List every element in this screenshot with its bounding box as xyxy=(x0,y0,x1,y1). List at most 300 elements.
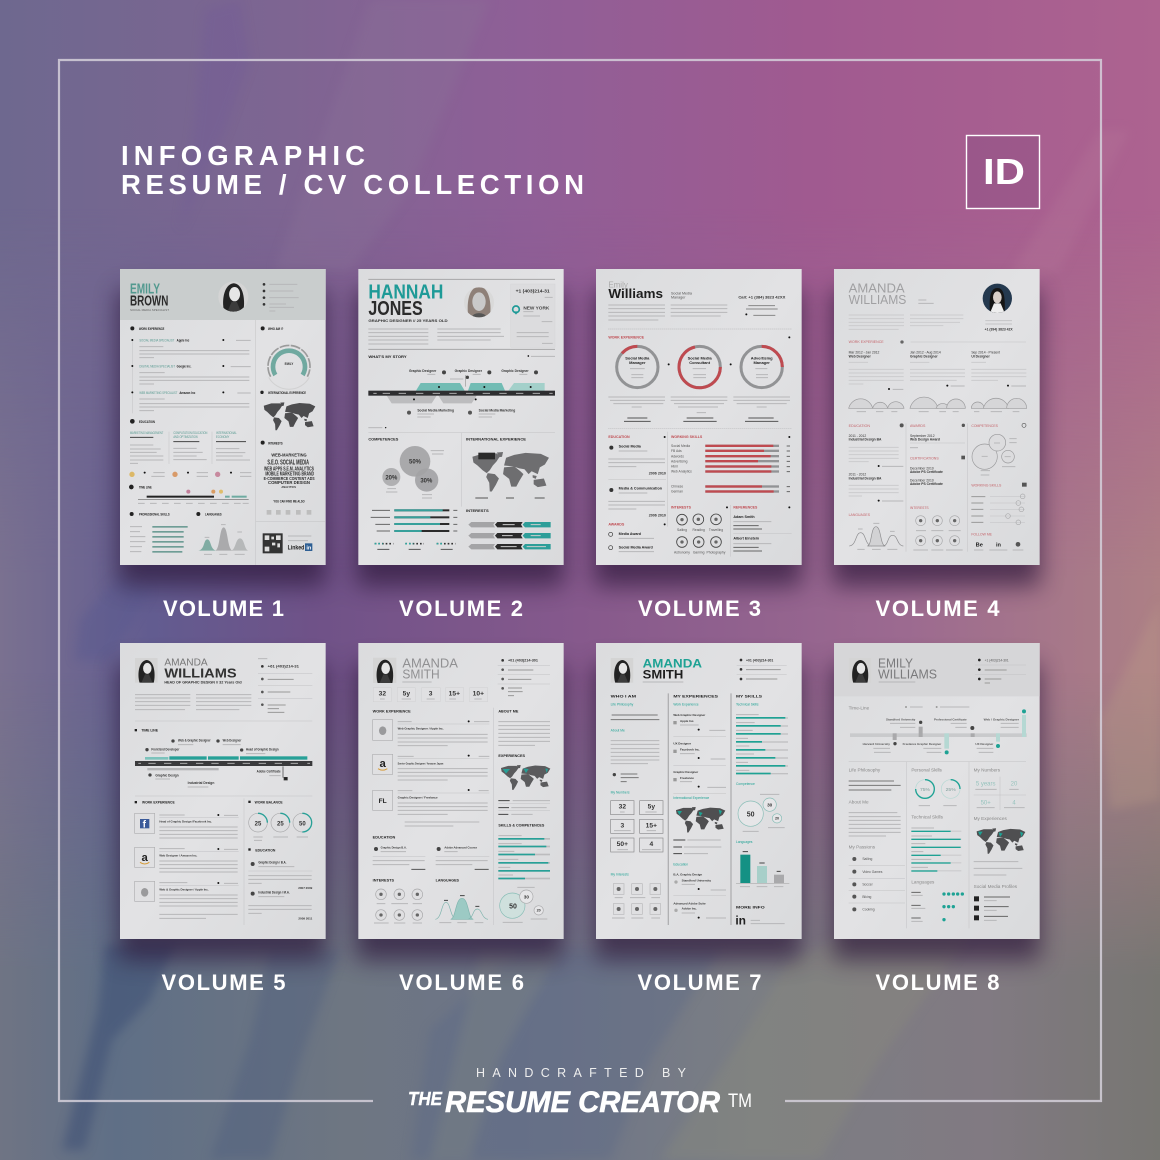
name xyxy=(849,280,906,307)
my numbers: 5 years xyxy=(976,782,995,788)
who I am column: 50+ xyxy=(617,841,628,848)
work balance rings: WORK BALANCE xyxy=(255,800,283,804)
my experiences column: MY EXPERIENCES xyxy=(673,693,718,698)
education: Industrial Design / M.A. xyxy=(258,891,290,895)
what's my story timeline: Graphic Designer xyxy=(455,369,483,373)
what's my story timeline xyxy=(368,355,555,428)
technical skills bars: Technical Skills xyxy=(911,815,944,820)
resume: Amanda Smith, volume 6 xyxy=(358,643,564,939)
life philosophy: About Me xyxy=(849,799,869,804)
time-line: Web / Graphic Designer xyxy=(984,717,1020,721)
who am I gauge: EMILY xyxy=(285,362,294,366)
my numbers: 4 xyxy=(1012,800,1016,806)
education: 2009 2011 xyxy=(298,916,313,920)
who I am column: 4 xyxy=(649,841,653,848)
languages area chart xyxy=(849,513,903,549)
international experience map xyxy=(466,437,549,498)
follow me xyxy=(971,532,1023,550)
my experiences column: Apple Inc. xyxy=(680,719,694,723)
volume labels: VOLUME 2 xyxy=(399,596,523,621)
work experience: Mar 2012 - Jan 2012 xyxy=(849,351,880,355)
education: 2011 - 2012 xyxy=(849,434,866,438)
name xyxy=(402,655,458,682)
who I am column: 32 xyxy=(619,804,626,811)
who I am column: 15+ xyxy=(646,822,657,829)
my numbers: My Numbers xyxy=(974,768,1001,773)
contact list xyxy=(498,659,550,696)
interests word cloud: WEB-MARKETING xyxy=(271,453,307,458)
my experiences column: Web Graphic Designer xyxy=(673,713,706,717)
work balance rings xyxy=(248,800,312,840)
row two, right pair of resumes xyxy=(596,643,1040,939)
education: AWARDS xyxy=(608,523,625,527)
resume: Emily Brown, volume 1 xyxy=(120,269,326,565)
skills and competences bars xyxy=(498,823,550,879)
footer credit: HANDCRAFTED BY xyxy=(476,1066,687,1080)
competence bubbles: 20 xyxy=(537,909,541,913)
my passions xyxy=(849,845,905,912)
name: HANNAH xyxy=(368,280,443,303)
my passions: Biking xyxy=(862,895,872,899)
QR code and LinkedIn xyxy=(263,533,312,553)
awards and certifications: AWARDS xyxy=(910,424,926,428)
competences bubble chart: 50% xyxy=(409,460,422,466)
languages area chart: LANGUAGES xyxy=(205,512,222,517)
my skills column: Competence xyxy=(736,782,755,786)
my passions: My Passions xyxy=(849,845,876,850)
references: REFERENCES xyxy=(733,506,758,510)
time line: Web Designer xyxy=(223,739,242,743)
about me: ABOUT ME xyxy=(498,709,519,713)
languages area chart xyxy=(435,878,488,923)
my experiences column: Work Experience xyxy=(673,703,699,707)
who I am column: 5y xyxy=(648,804,655,811)
portrait xyxy=(464,287,494,317)
name: JONES xyxy=(368,298,423,320)
education: Media Award xyxy=(619,532,641,536)
stat boxes: 15+ xyxy=(449,691,460,698)
work experience rings: Manager xyxy=(629,360,646,365)
professional skills bars: PROFESSIONAL SKILLS xyxy=(139,512,170,517)
my numbers xyxy=(974,768,1026,810)
work experience: a xyxy=(142,852,149,864)
references: Adam Smith xyxy=(733,515,755,519)
work experience rings: Manager xyxy=(753,360,770,365)
interests icons: INTERESTS xyxy=(373,878,395,882)
education: EDUCATION xyxy=(255,848,276,852)
name: EMILY xyxy=(130,281,160,297)
footer credit: TM xyxy=(728,1091,752,1112)
contact list: +01 (403)214-301 xyxy=(746,659,773,663)
follow me: FOLLOW ME xyxy=(971,532,993,536)
work experience: UI Designer xyxy=(971,354,991,358)
work experience: WORK EXPERIENCE xyxy=(373,709,411,713)
name: EMILY xyxy=(878,656,914,670)
education: 2006 2010 xyxy=(649,471,666,475)
who I am column: WHO I AM xyxy=(611,693,637,698)
name: AMANDA xyxy=(643,656,702,670)
working skills bars: German xyxy=(671,490,683,494)
name: GRAPHIC DESIGNER // 25 YEARS OLD xyxy=(368,318,448,323)
work experience rings: Consultant xyxy=(689,360,711,365)
my skills column xyxy=(735,693,789,928)
education: ECONOMY xyxy=(216,435,230,439)
name: SOCIAL MEDIA SPECIALIST xyxy=(130,308,169,312)
contact list xyxy=(263,283,299,311)
my skills column: MY SKILLS xyxy=(736,693,762,698)
my passions: Cooking xyxy=(862,908,875,912)
references xyxy=(733,506,792,551)
volume labels: VOLUME 6 xyxy=(399,970,524,995)
QR code and LinkedIn: Linked xyxy=(288,545,305,551)
my experiences column: Facebook Inc. xyxy=(680,747,700,751)
professional skills bars xyxy=(130,512,188,553)
interests word cloud: S.E.O. SOCIAL MEDIA xyxy=(267,457,309,466)
my experiences column: UX Designer xyxy=(673,742,692,746)
education: EDUCATION xyxy=(608,435,630,439)
what's my story timeline: Social Media Marketing xyxy=(479,408,515,412)
time line: Graphic Design xyxy=(155,773,179,777)
my experiences map: My Experiences xyxy=(974,816,1007,821)
work experience rings: Advertising xyxy=(751,356,773,361)
time-line: Standford University xyxy=(886,717,916,721)
work experience: Apple Inc xyxy=(177,339,189,343)
work experience xyxy=(849,340,1027,412)
work balance rings: 50 xyxy=(299,821,306,827)
interests chips: INTERESTS xyxy=(466,509,489,513)
name: Emily xyxy=(608,280,628,289)
you can find me xyxy=(267,499,311,515)
education: Graphic Design / B.A. xyxy=(258,861,286,865)
work experience: Sep 2014 - Present xyxy=(971,351,1000,355)
name xyxy=(368,280,448,323)
work experience rings xyxy=(608,336,790,421)
who I am column: 3 xyxy=(620,822,624,829)
my experiences column: B.A, Graphic Design xyxy=(673,873,702,877)
time line xyxy=(129,485,249,503)
contact list xyxy=(975,659,1026,683)
what's my story timeline: WHAT'S MY STORY xyxy=(368,355,407,359)
competences bubble chart xyxy=(368,433,555,507)
footer credit xyxy=(408,1066,752,1119)
who I am column: My Interests xyxy=(611,873,629,877)
work experience xyxy=(130,326,251,413)
work experience rings: WORK EXPERIENCE xyxy=(608,336,645,340)
stat boxes: 10+ xyxy=(473,691,484,698)
education: Industrial Design BA xyxy=(849,476,882,480)
volume labels: VOLUME 7 xyxy=(638,970,762,995)
my numbers: 50+ xyxy=(981,800,991,806)
work experience: Graphic Designer xyxy=(910,354,938,358)
working skills sliders: WORKING SKILLS xyxy=(971,483,1002,487)
time line: Web & Graphic Designer xyxy=(178,739,211,743)
name: BROWN xyxy=(130,294,168,310)
my skills column: Languages xyxy=(736,840,753,844)
about me xyxy=(498,709,550,745)
interests word cloud: MOBILE MARKETING BRAND xyxy=(265,472,314,478)
awards and certifications: September 2012 xyxy=(910,434,935,438)
stat boxes: 5y xyxy=(403,691,410,698)
name xyxy=(164,658,242,685)
resume: Amanda Williams, volume 4: +1 (394) 3823 42X xyxy=(985,327,1013,331)
resume: Amanda Smith, volume 7 xyxy=(596,643,802,939)
time line: Head of Graphic Design xyxy=(246,748,279,752)
awards and certifications: December 2010 xyxy=(910,478,934,482)
competences bubbles xyxy=(906,423,1026,552)
who I am column: My Numbers xyxy=(611,790,630,794)
name: HEAD OF GRAPHIC DESIGN // 32 Years Old xyxy=(164,681,242,685)
stat boxes xyxy=(373,688,488,702)
my experiences column: International Experience xyxy=(673,796,709,800)
skill bars xyxy=(371,509,457,549)
contact list: +61 (403)214-31 xyxy=(268,665,299,669)
what's my story timeline: Graphic Designer xyxy=(409,369,437,373)
interests icons xyxy=(671,506,728,554)
education: EDUCATION xyxy=(849,424,870,428)
my experiences column xyxy=(673,693,726,919)
work experience: Web Graphic Designer / Apple Inc. xyxy=(398,727,444,731)
work experience: a xyxy=(380,758,387,770)
education: COMPUTATION EDUCATION xyxy=(173,431,208,435)
education xyxy=(608,435,666,552)
work experience: Amazon Inc xyxy=(179,391,195,395)
work experience xyxy=(373,709,489,826)
my passions: Sailing xyxy=(862,857,872,861)
working skills bars xyxy=(671,435,790,494)
follow me: in xyxy=(996,543,1002,549)
education: Social Media Award xyxy=(619,545,653,549)
interests word cloud: COMPUTER DESIGN xyxy=(268,480,311,485)
logo badge: ID: ID xyxy=(983,151,1025,192)
interests icons: Gaming xyxy=(693,550,705,554)
my experiences column: Freelance xyxy=(680,776,694,780)
references: Albert Einstein xyxy=(733,537,759,541)
interests icons xyxy=(373,878,423,923)
volume labels: VOLUME 4 xyxy=(876,596,1000,621)
who I am column xyxy=(611,693,663,918)
contact box: NEW YORK xyxy=(523,305,550,311)
name: WILLIAMS xyxy=(164,667,237,681)
volume labels: VOLUME 3 xyxy=(638,596,761,621)
name: AMANDA xyxy=(849,280,905,295)
working skills bars: Advertising xyxy=(671,459,688,463)
personal skills rings: 25% xyxy=(946,787,956,793)
competence bubbles: 30 xyxy=(524,895,529,900)
competence bubbles xyxy=(500,887,547,922)
education xyxy=(849,423,904,502)
skills and competences bars: SKILLS & COMPETENCES xyxy=(498,823,545,827)
education: INTERNATIONAL xyxy=(216,431,237,435)
social media profiles: Social Media Profiles xyxy=(974,884,1018,889)
education: 2011 - 2012 xyxy=(849,473,866,477)
you can find me: YOU CAN FIND ME ALSO xyxy=(273,499,305,503)
work experience: Head of Graphic Design /Facebook Inc. xyxy=(159,819,212,823)
contact list xyxy=(258,659,312,712)
education: Graphic Design B.A. xyxy=(381,846,407,850)
competences bubble chart: 20% xyxy=(385,475,398,481)
row two, left pair of resumes xyxy=(120,643,564,939)
my experiences column: Graphic Designer xyxy=(673,770,699,774)
work balance rings: 25 xyxy=(255,821,262,827)
contact list: +01 (403)214-301 xyxy=(508,659,538,663)
work experience: WEB MARKETING SPECIALIST xyxy=(139,391,178,395)
my passions: Soccer xyxy=(862,883,874,887)
interests icons xyxy=(910,506,963,550)
education: MARKETING MANAGEMENT xyxy=(130,431,163,435)
what's my story timeline: Graphic Designer xyxy=(501,369,529,373)
personal skills rings: 75% xyxy=(920,787,931,793)
work experience: SOCIAL MEDIA SPECIALIST xyxy=(139,339,175,343)
contact list xyxy=(737,659,787,680)
resume: Amanda Williams, volume 5 xyxy=(120,643,326,939)
who I am column: About Me xyxy=(611,729,625,733)
work experience: DIGITAL MEDIA SPECIALIST xyxy=(139,365,176,369)
resume: Emily Williams, volume 3 xyxy=(596,269,802,565)
my skills column: in xyxy=(735,914,746,928)
education xyxy=(129,419,251,477)
competences bubble chart: COMPETENCES xyxy=(368,437,399,441)
work experience: WORK EXPERIENCE xyxy=(139,326,165,331)
logo badge: ID xyxy=(966,136,1040,208)
volume labels: VOLUME 8 xyxy=(876,970,1000,995)
working skills bars: FB Ads xyxy=(671,449,682,453)
my skills column: Technical Skills xyxy=(736,703,759,707)
name: SMITH xyxy=(643,667,683,681)
contact: Call: +1 (384) 3823 42XX xyxy=(738,294,786,299)
education: EDUCATION xyxy=(139,419,155,424)
who am I gauge: WHO AM I? xyxy=(268,327,284,331)
my experiences column: Standford University xyxy=(682,878,711,882)
time line: Adobe Certificate xyxy=(257,769,281,773)
portrait xyxy=(373,658,396,683)
education: Industrial Design BA xyxy=(849,438,882,442)
row one, right pair of resumes xyxy=(596,269,1040,565)
languages dots xyxy=(911,880,964,921)
volume labels: VOLUME 5 xyxy=(162,970,286,995)
languages area chart: LANGUAGES xyxy=(436,878,460,882)
working skills bars: Adwords xyxy=(671,454,684,458)
stat boxes: 32 xyxy=(379,691,386,698)
who I am column: Life Philosophy xyxy=(611,703,634,707)
portrait xyxy=(218,281,248,313)
experiences map: EXPERIENCES xyxy=(498,754,526,758)
time-line: UX Designer xyxy=(975,742,994,746)
name: WILLIAMS xyxy=(849,292,906,307)
personal skills rings xyxy=(911,768,960,806)
name: AMANDA xyxy=(402,655,458,670)
my skills column: 30 xyxy=(767,803,773,808)
life philosophy: Life Philosophy xyxy=(849,768,881,773)
languages area chart: LANGUAGES xyxy=(849,513,871,517)
name xyxy=(608,280,693,301)
interests icons: Travelling xyxy=(709,528,723,532)
work experience: Jan 2012 - Aug 2014 xyxy=(910,351,941,355)
education: 2006 2010 xyxy=(649,513,666,517)
working skills bars: Chinese xyxy=(671,485,683,489)
name: Williams xyxy=(608,287,663,301)
my numbers: 20 xyxy=(1011,782,1018,788)
international experience map: INTERNATIONAL EXPERIENCE xyxy=(466,437,527,441)
work experience: WORK EXPERIENCE xyxy=(849,340,884,344)
my experiences map xyxy=(974,816,1025,875)
time line: Industrial Design xyxy=(188,781,214,785)
awards and certifications: Web Design Award xyxy=(910,438,940,442)
languages area chart xyxy=(196,512,249,554)
what's my story timeline: Social Media Marketing xyxy=(417,408,454,412)
working skills bars: Html xyxy=(671,464,678,468)
interests word cloud: ANALYTICS xyxy=(281,485,296,489)
awards and certifications: Adobe PS Certificate xyxy=(910,470,943,474)
portrait xyxy=(611,658,633,683)
my skills column: 50 xyxy=(747,811,755,818)
name: Social Media xyxy=(671,292,693,296)
personal skills rings: Personal Skills xyxy=(911,768,943,773)
international experience map: INTERNATIONAL EXPERIENCE xyxy=(268,391,306,395)
work experience: Web Designer / Amazon Inc. xyxy=(159,853,197,857)
time-line: Time-Line xyxy=(849,705,870,710)
name: SMITH xyxy=(402,667,440,682)
stat boxes: 3 xyxy=(429,691,433,698)
my skills column: MORE INFO xyxy=(736,904,765,909)
work experience rings: Social Media xyxy=(625,356,650,361)
time line xyxy=(135,729,312,787)
portrait xyxy=(983,284,1012,313)
time line: TIME LINE xyxy=(141,729,159,733)
work experience: Senior Graphic Designer / Amazon Japan xyxy=(398,761,443,765)
interests icons: INTERESTS xyxy=(910,506,929,510)
contact list: +1 (403)214-301 xyxy=(985,659,1009,663)
interests word cloud: INTERESTS xyxy=(268,441,283,445)
resume: Amanda Williams, volume 4 xyxy=(834,269,1040,565)
name xyxy=(878,656,937,681)
work experience: Google Inc. xyxy=(177,365,191,369)
experiences map xyxy=(498,754,550,814)
interests icons: INTERESTS xyxy=(671,506,692,510)
education: Adobe Advanced Course xyxy=(444,846,477,850)
work experience: f xyxy=(143,820,147,831)
education xyxy=(248,848,313,920)
card shadows xyxy=(118,290,1040,960)
education: Social Media xyxy=(619,445,642,449)
contact xyxy=(738,294,786,315)
awards and certifications: December 2010 xyxy=(910,466,934,470)
title: RESUME / CV COLLECTION xyxy=(121,169,584,200)
work experience: Web & Graphic Designer / Apple Inc. xyxy=(159,887,209,891)
work experience: WORK EXPERIENCE xyxy=(142,801,175,805)
working skills bars: Social Media xyxy=(671,444,690,448)
education xyxy=(373,835,489,869)
footer credit: RESUME CREATOR xyxy=(445,1086,720,1119)
time line: Front End Developer xyxy=(151,747,180,751)
time-line: Professional Certificate xyxy=(934,717,967,721)
volume labels xyxy=(162,596,1000,995)
competences bubbles: COMPETENCES xyxy=(971,424,999,428)
my skills column: 20 xyxy=(775,817,779,821)
time-line: Freelance Graphic Designer xyxy=(903,742,942,746)
work experience: Graphic Designer / Freelance xyxy=(398,795,438,799)
languages dots: Languages xyxy=(911,880,935,885)
education: Media & Communication xyxy=(619,487,662,491)
contact box xyxy=(511,284,555,347)
international experience map xyxy=(260,391,315,430)
QR code and LinkedIn: in xyxy=(306,545,312,551)
footer credit: THE xyxy=(408,1089,443,1109)
work experience xyxy=(135,801,239,918)
portrait xyxy=(849,658,871,683)
resume: Hannah Jones, volume 2 xyxy=(358,269,564,565)
follow me: Be xyxy=(976,543,983,549)
time-line xyxy=(849,705,1027,754)
